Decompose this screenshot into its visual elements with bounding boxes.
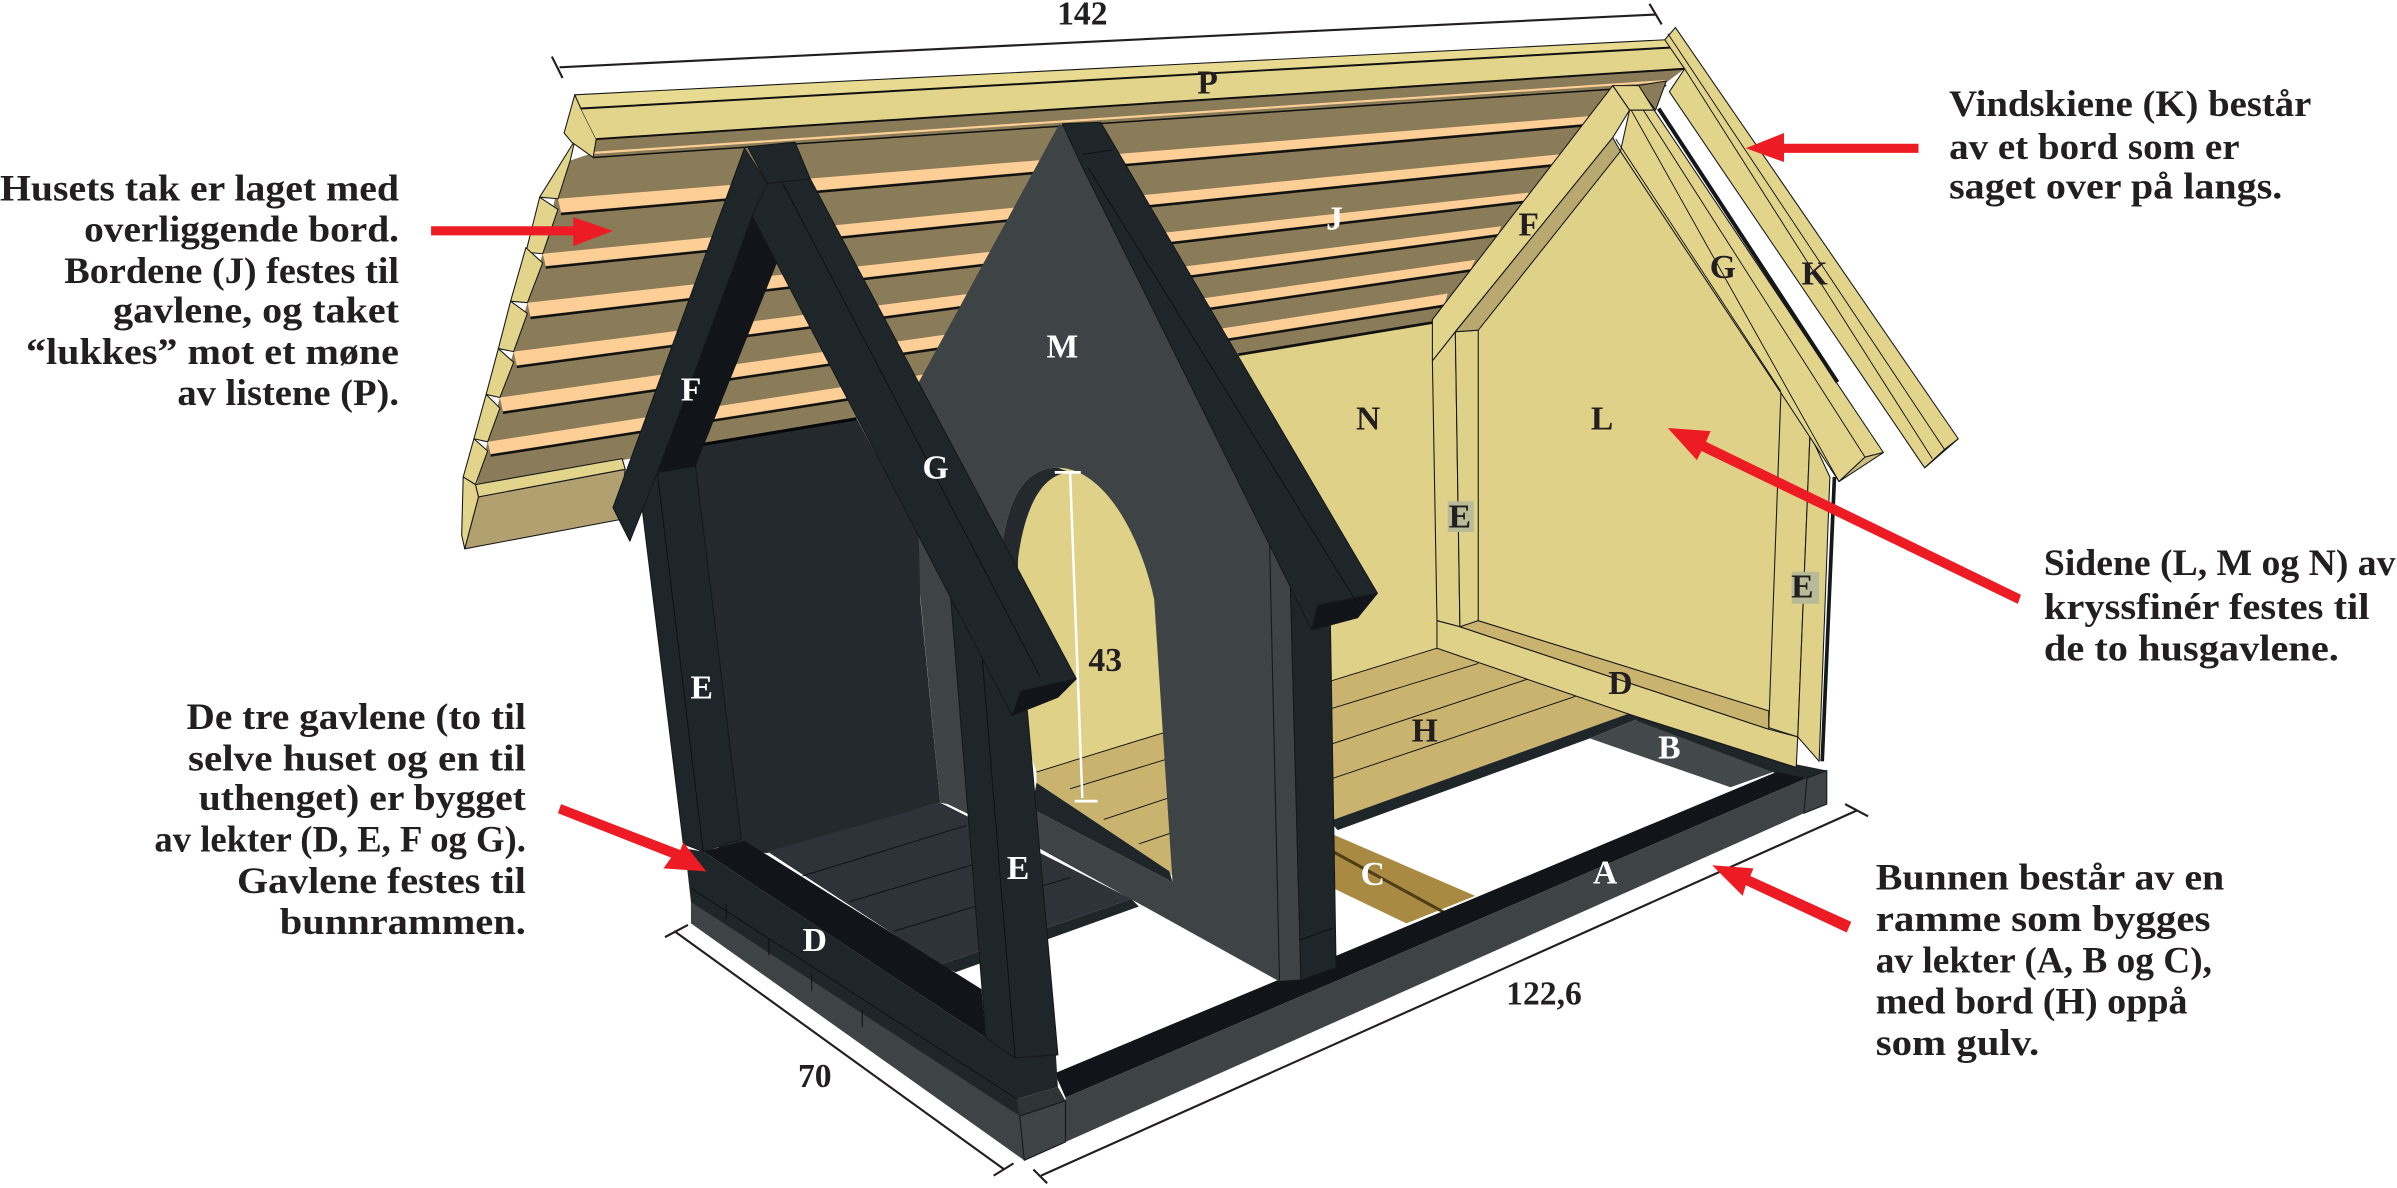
text: gables: uthenget) er bygget — [199, 777, 527, 818]
text: wind boards: Vindskiene (K) består — [1949, 83, 2311, 124]
floor boards H — [1036, 648, 1628, 879]
text: gables: av lekter (D, E, F og G). — [154, 819, 526, 860]
text: base: av lekter (A, B og C), — [1876, 939, 2212, 980]
text: base: Bunnen består av en — [1876, 857, 2224, 898]
text: roof: overliggende bord. — [84, 209, 399, 250]
part letters: E — [1007, 850, 1029, 887]
part letters: H — [1412, 712, 1438, 749]
roof — [462, 40, 1685, 549]
dimension: 122,6: 122,6 — [1506, 975, 1582, 1012]
panel: back wall N — [994, 323, 1437, 772]
front gable posts and rafters — [613, 142, 1076, 1058]
text: sides — [2044, 542, 2396, 668]
arrow: roof — [431, 217, 613, 246]
part letters: B — [1658, 729, 1681, 766]
text: gables: De tre gavlene (to til — [187, 696, 526, 737]
part letters: F — [681, 372, 701, 409]
dimension: 43: 43 — [1088, 642, 1122, 679]
part letters: N — [1356, 401, 1380, 438]
part letters: L — [1591, 401, 1613, 438]
text: base: som gulv. — [1876, 1022, 2039, 1063]
text: roof: gavlene, og taket — [113, 290, 400, 331]
arrow: sides — [1668, 428, 2021, 604]
part letters: E — [1449, 498, 1471, 535]
base frame front D — [685, 841, 1066, 1160]
part letters: D — [803, 922, 827, 959]
text: gables: bunnrammen. — [280, 901, 526, 942]
arrow: gables — [558, 804, 706, 871]
arrow: base — [1712, 865, 1851, 933]
text: sides: Sidene (L, M og N) av — [2044, 542, 2396, 583]
text: roof: Husets tak er laget med — [0, 167, 399, 208]
text: base — [1876, 857, 2224, 1063]
dimension: 142 — [552, 0, 1662, 78]
text: wind boards: saget over på langs. — [1949, 166, 2282, 207]
part letters: E — [1791, 569, 1814, 606]
part letters: P — [1197, 64, 1218, 101]
part letters: C — [1361, 856, 1385, 893]
dimension: 70 — [665, 925, 1014, 1176]
right gable — [1432, 86, 1883, 767]
text: sides: de to husgavlene. — [2044, 627, 2339, 668]
text: base: med bord (H) oppå — [1876, 981, 2188, 1022]
part letters — [681, 64, 1828, 959]
part letters: K — [1801, 255, 1828, 292]
text: sides: kryssfinér festes til — [2044, 586, 2369, 627]
part letters: F — [1518, 206, 1539, 243]
text: roof: av listene (P). — [177, 372, 399, 413]
text: gables: selve huset og en til — [188, 737, 526, 778]
text: base: ramme som bygges — [1876, 898, 2210, 939]
middle gable M with door — [919, 122, 1377, 981]
text: roof — [0, 167, 400, 413]
part letters: A — [1593, 855, 1618, 892]
dimension: 70: 70 — [798, 1058, 832, 1095]
part letters: G — [922, 450, 949, 487]
base frame back and side B — [1330, 714, 1827, 830]
text: gables: Gavlene festes til — [237, 860, 526, 901]
beam C — [1330, 833, 1475, 923]
text: wind boards: av et bord som er — [1949, 126, 2240, 167]
text: roof: Bordene (J) festes til — [64, 250, 399, 291]
part letters: E — [690, 670, 713, 707]
text: roof: “lukkes” mot et møne — [26, 331, 399, 372]
beam A — [1055, 770, 1827, 1142]
part letters: M — [1047, 329, 1078, 366]
front gable inner wall and floor — [673, 417, 1139, 972]
part letters: D — [1608, 665, 1633, 702]
text: gables — [154, 696, 527, 942]
text: wind boards — [1949, 83, 2311, 207]
wind board K — [1665, 28, 1958, 468]
part letters: G — [1710, 249, 1736, 286]
dimension: 122,6 — [1033, 804, 1868, 1183]
part letters: J — [1326, 200, 1343, 237]
arrow: wind boards — [1746, 133, 1919, 162]
